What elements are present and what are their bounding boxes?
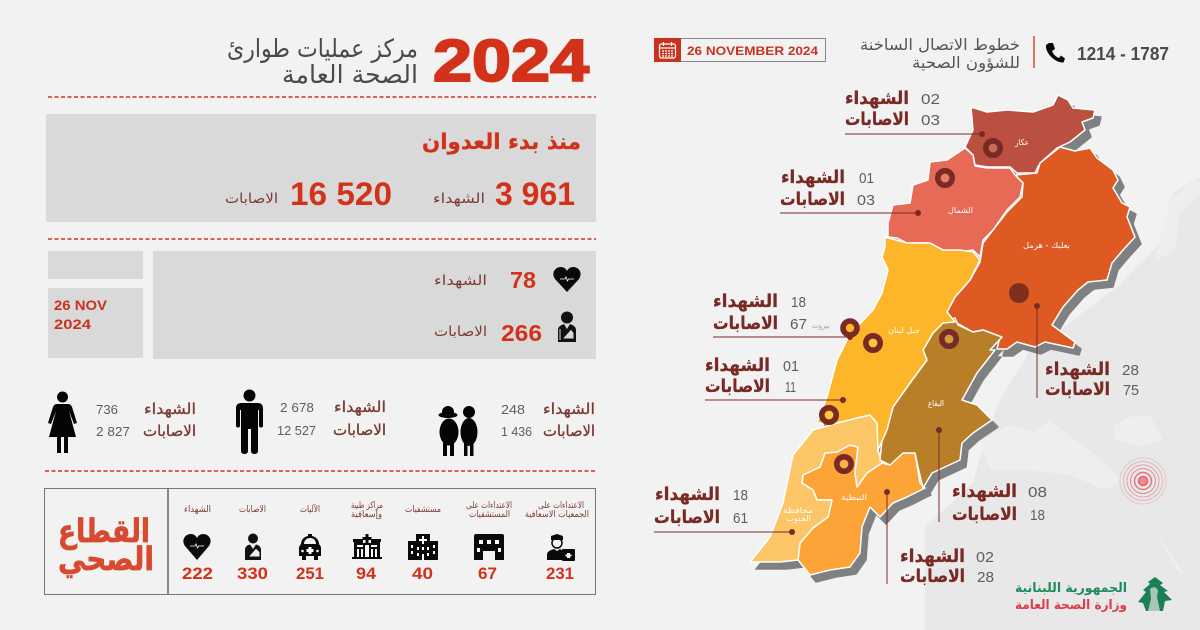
callout: Nabatieh <box>884 489 994 587</box>
callout: Bekaa: 08 <box>1028 484 1047 501</box>
callout: Baalbek-Hermel: 75 <box>1123 382 1139 399</box>
region names: بعلبك - هرمل <box>1023 241 1070 250</box>
icon: cedar tree <box>1138 577 1172 611</box>
callout: Nabatieh: الشهداء <box>900 546 965 567</box>
logo text: الجمهورية اللبنانية <box>1015 581 1127 596</box>
callout: Beirut <box>713 291 857 340</box>
region: Bekaa <box>880 318 1002 488</box>
total injuries <box>225 176 392 212</box>
icon: ambulance <box>299 534 321 560</box>
stat: attacks on ambulance societies: الاعتداءات على <box>538 501 584 511</box>
callout: Akkar: الاصابات <box>845 109 909 130</box>
demographics: children: 248 <box>501 402 525 417</box>
demographics: children: 1 436 <box>501 424 532 439</box>
stat: vehicles <box>296 503 324 583</box>
stat: deaths: 222 <box>182 564 213 583</box>
demographics: women: الاصابات <box>143 422 196 440</box>
stat: deaths: الشهداء <box>184 505 211 515</box>
daily injuries: 266 <box>501 320 542 346</box>
hotline number: 1214 - 1787 <box>1077 43 1169 64</box>
callout: Bekaa: 18 <box>1030 507 1045 524</box>
demographics: children <box>438 400 595 456</box>
callout: Akkar: 03 <box>921 112 940 129</box>
demographics: women: 736 <box>96 402 118 417</box>
sector heading: الصحي <box>58 540 154 578</box>
stat: medical and ambulance centres: 94 <box>356 564 377 583</box>
date tag <box>654 38 826 62</box>
callout: Beirut: الاصابات <box>713 313 778 334</box>
callout: Nabatieh: 28 <box>977 569 994 586</box>
callout: Baalbek-Hermel <box>1034 303 1139 400</box>
total injuries: الاصابات <box>225 191 278 207</box>
callout: Nabatieh: الاصابات <box>900 566 965 587</box>
map of Lebanon <box>654 88 1139 587</box>
daily injuries: الاصابات <box>434 324 487 340</box>
stat: deaths <box>182 505 213 583</box>
stat: attacks on hospitals: الاعتداءات على <box>466 501 512 511</box>
panel heading: منذ بدء العدوان <box>422 130 581 155</box>
hotline text <box>860 35 1020 73</box>
icon: paramedic <box>547 534 575 561</box>
icon: injured person <box>245 534 261 560</box>
stat: vehicles: 251 <box>296 564 324 583</box>
callout: Bekaa: الاصابات <box>952 504 1017 525</box>
demographics: children: الاصابات <box>543 422 595 440</box>
logo text: وزارة الصحة العامة <box>1015 598 1127 613</box>
callout: North: الاصابات <box>780 189 845 210</box>
callout: South: 18 <box>733 487 748 504</box>
region: Nabatieh <box>798 445 925 575</box>
callout: Bekaa: الشهداء <box>952 481 1017 502</box>
stat: attacks on hospitals <box>466 501 512 583</box>
icon: clinic <box>352 534 382 559</box>
icon: heart <box>183 534 211 560</box>
date tag: 26 NOVEMBER 2024 <box>687 46 819 58</box>
callout: Beirut: بيروت <box>812 321 830 330</box>
callout: Baalbek-Hermel: 28 <box>1122 362 1139 379</box>
stat: attacks on ambulance societies <box>525 501 589 583</box>
callout: North <box>780 167 921 216</box>
demographics: women: الشهداء <box>144 400 196 418</box>
icon: phone <box>1046 43 1065 63</box>
stat: medical and ambulance centres <box>351 501 383 583</box>
sector heading <box>58 512 154 578</box>
callout: North: الشهداء <box>781 167 845 188</box>
heading: operations centre: الصحة العامة <box>282 60 418 89</box>
callout: Baalbek-Hermel: الاصابات <box>1045 379 1110 400</box>
region: Mount Lebanon <box>817 237 980 450</box>
demographics: men: 12 527 <box>277 423 316 438</box>
background world map <box>925 178 1200 630</box>
icon: woman <box>48 392 77 453</box>
logo text <box>1015 581 1127 613</box>
region names: جبل لبنان <box>888 326 920 335</box>
sector heading: القطاع <box>58 512 150 550</box>
total injuries: 16 520 <box>290 176 392 212</box>
region names: الجنوب <box>786 514 811 523</box>
callout: South: الاصابات <box>654 507 720 528</box>
total deaths: الشهداء <box>433 191 485 207</box>
region names: الشمال <box>948 206 973 215</box>
panel: date blocks: 2024 <box>54 316 91 332</box>
callout: South <box>654 484 795 535</box>
stat: attacks on ambulance societies: الجمعيات الاسعافية <box>525 510 589 520</box>
panel: health sector <box>44 488 596 594</box>
callout: Mount Lebanon: 01 <box>783 358 799 375</box>
daily deaths: الشهداء <box>434 273 487 289</box>
region names: النبطية <box>841 493 867 502</box>
callout: Beirut: 18 <box>791 294 806 311</box>
demographics: women: 2 827 <box>96 424 130 439</box>
heading: operations centre: مركز عمليات طوارئ <box>227 34 418 63</box>
stat: attacks on hospitals: 67 <box>478 564 497 583</box>
callout: Mount Lebanon: الشهداء <box>705 355 770 376</box>
location markers <box>822 141 1029 471</box>
stat: medical and ambulance centres: مراكز طبية <box>351 501 383 511</box>
stat: hospitals: مستشفيات <box>405 505 441 515</box>
callout: Beirut: 67 <box>790 316 807 333</box>
callout: Mount Lebanon: الاصابات <box>705 376 770 397</box>
title: 2024: 2024 <box>433 28 589 94</box>
icon: injured person <box>558 312 576 342</box>
panel: daily figures <box>153 251 596 359</box>
icon: calendar <box>660 42 676 58</box>
daily deaths <box>434 267 536 293</box>
demographics: men: 2 678 <box>280 400 314 415</box>
region names: محافظة <box>783 506 813 515</box>
stat: vehicles: الآليات <box>300 503 320 515</box>
panel: date blocks <box>48 251 143 358</box>
icon: hospital <box>408 534 438 560</box>
region names: البقاع <box>928 399 944 408</box>
region names <box>783 138 1070 523</box>
callout: Mount Lebanon: 11 <box>785 379 796 396</box>
icon: children <box>438 406 478 456</box>
callout: Beirut: الشهداء <box>713 291 778 312</box>
demographics: men: الاصابات <box>333 421 386 439</box>
stat: attacks on ambulance societies: 231 <box>546 564 574 583</box>
stat: injured: الاصابات <box>239 505 266 515</box>
hotline text: للشؤون الصحية <box>912 53 1020 73</box>
callout: South: الشهداء <box>655 484 720 505</box>
stat: attacks on hospitals: المستشفيات <box>469 510 510 520</box>
callout: Baalbek-Hermel: الشهداء <box>1045 359 1110 380</box>
demographics: women <box>48 392 196 453</box>
region: North <box>888 148 1023 257</box>
callout: Nabatieh: 02 <box>976 549 994 566</box>
daily deaths: 78 <box>510 267 536 293</box>
daily injuries <box>434 320 542 346</box>
callout: North: 01 <box>859 170 874 187</box>
region: Baalbek-Hermel <box>947 147 1135 349</box>
stat: medical and ambulance centres: وإسعافية <box>351 510 382 520</box>
total deaths <box>433 176 575 212</box>
total deaths: 3 961 <box>495 176 575 212</box>
radar location pulse <box>1120 458 1166 504</box>
demographics: children: الشهداء <box>543 400 595 418</box>
ministry logo <box>1015 577 1172 613</box>
stat: injured: 330 <box>237 564 268 583</box>
region names: عكار <box>1014 138 1029 147</box>
region: South <box>750 415 882 562</box>
region: Akkar <box>965 95 1095 173</box>
stat: hospitals: 40 <box>412 564 433 583</box>
icon: heart <box>553 267 581 292</box>
map regions <box>750 95 1135 575</box>
panel: since the start of the aggression <box>46 114 596 222</box>
callout: North: 03 <box>857 192 875 209</box>
demographics: men <box>236 390 386 454</box>
icon: building <box>474 534 504 560</box>
heading: operations centre <box>227 34 418 89</box>
icon: man <box>236 390 263 454</box>
stat: injured <box>237 505 268 583</box>
stat: hospitals <box>405 505 441 583</box>
callout: Akkar: 02 <box>921 91 940 108</box>
callout: Akkar: الشهداء <box>845 88 909 109</box>
demographics: men: الشهداء <box>334 398 386 416</box>
panel: date blocks: 26 NOV <box>54 297 108 313</box>
callout: Mount Lebanon <box>705 355 846 403</box>
callout: South: 61 <box>733 510 748 527</box>
callout: Bekaa <box>936 427 1047 525</box>
callout: Akkar <box>845 88 985 137</box>
hotline text: خطوط الاتصال الساخنة <box>860 35 1020 55</box>
